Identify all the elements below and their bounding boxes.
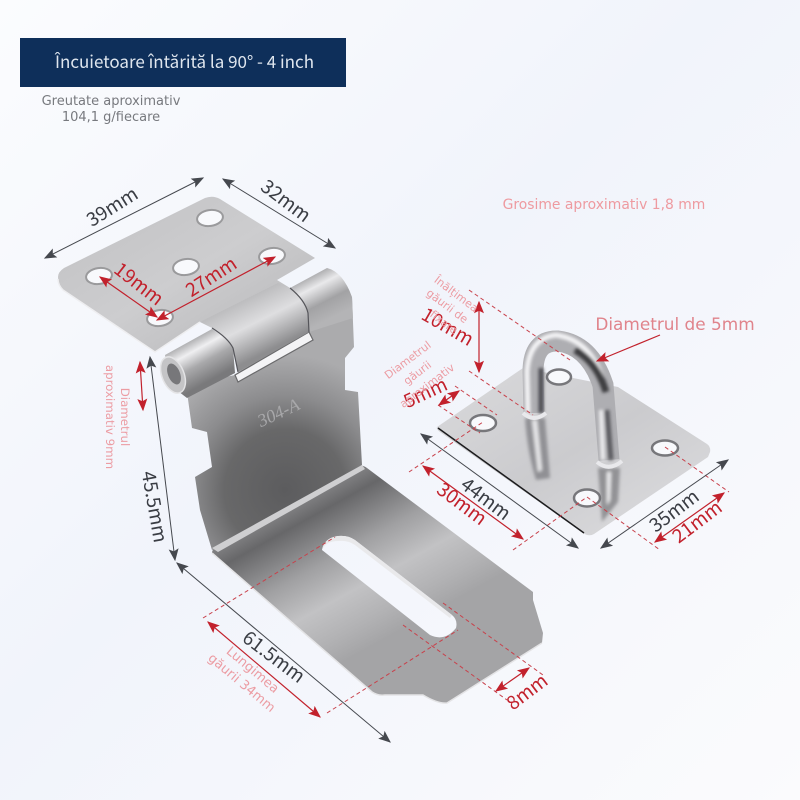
horizontal leaf with slot bbox=[212, 466, 543, 703]
note: hole diameter: Diametrul bbox=[382, 339, 434, 382]
weight note: 104,1 g/fiecare bbox=[62, 110, 160, 125]
note: fixing hole height: Înălțimea bbox=[431, 273, 481, 315]
dimension label 32mm: 32mm bbox=[256, 172, 317, 228]
dimension label 27mm: 27mm bbox=[180, 249, 242, 303]
dimension label 30mm: 30mm bbox=[432, 475, 493, 531]
slot under the middle knuckle bbox=[235, 332, 313, 382]
bend highlight bbox=[212, 465, 365, 552]
dark dimension arrows bbox=[45, 178, 728, 742]
dimension label 44mm: 44mm bbox=[456, 470, 517, 526]
red dimension arrows bbox=[100, 257, 724, 717]
eye plate bbox=[437, 335, 710, 535]
title banner bbox=[20, 38, 346, 87]
dimension label 35mm: 35mm bbox=[643, 482, 704, 538]
dimension label 61.5mm: 61.5mm bbox=[237, 624, 311, 689]
hinge pin end bbox=[156, 353, 190, 397]
dimension label 8mm: 8mm bbox=[500, 667, 553, 716]
hasp: top plate bbox=[58, 197, 315, 352]
dimension label 10mm: 10mm bbox=[417, 300, 479, 352]
thickness note: Grosime aproximativ 1,8 mm bbox=[503, 197, 705, 213]
note: pin diameter: Diametrul bbox=[118, 388, 132, 446]
title banner: Încuietoare întărită la 90° - 4 inch bbox=[54, 48, 314, 73]
note: hole diameter: aproximativ bbox=[397, 361, 458, 411]
note: fixing hole height: găurii de bbox=[424, 286, 471, 326]
lower edge highlight bbox=[212, 553, 542, 703]
weight note: Greutate aproximativ bbox=[42, 94, 180, 109]
dimension label 39mm: 39mm bbox=[81, 180, 143, 232]
dimension label 21mm: 21mm bbox=[666, 493, 727, 549]
dimension label 5mm hole: 5mm bbox=[399, 370, 451, 414]
slot edge bbox=[322, 536, 452, 618]
dimension label 45.5mm: 45.5mm bbox=[136, 469, 175, 544]
hasp: lower bracket bbox=[186, 297, 543, 703]
right knuckle bbox=[290, 268, 353, 332]
stamped mark 304-A: 304-A bbox=[253, 394, 304, 431]
ring collars bbox=[523, 413, 622, 467]
plate holes bbox=[85, 208, 286, 328]
knuckle seams bbox=[212, 288, 309, 372]
note: fixing hole height: fixare bbox=[427, 308, 460, 337]
note: slot length: Lungimea bbox=[223, 644, 282, 697]
left knuckle bbox=[165, 329, 235, 398]
U ring bbox=[527, 335, 611, 460]
note: slot length: găurii 34mm bbox=[205, 651, 278, 716]
note: hole diameter: găurii bbox=[401, 358, 434, 388]
ring reflections on plate bbox=[525, 418, 620, 522]
callout: ring diameter: Diametrul de 5mm bbox=[595, 314, 755, 334]
hasp: hinge barrel bbox=[156, 268, 353, 398]
note: pin diameter: aproximativ 9mm bbox=[103, 365, 117, 469]
eye plate holes bbox=[470, 370, 678, 506]
dashed guide lines bbox=[203, 290, 729, 713]
dimension label 19mm: 19mm bbox=[109, 255, 170, 311]
vertical leaf bbox=[186, 297, 362, 550]
middle knuckle bbox=[200, 283, 309, 372]
